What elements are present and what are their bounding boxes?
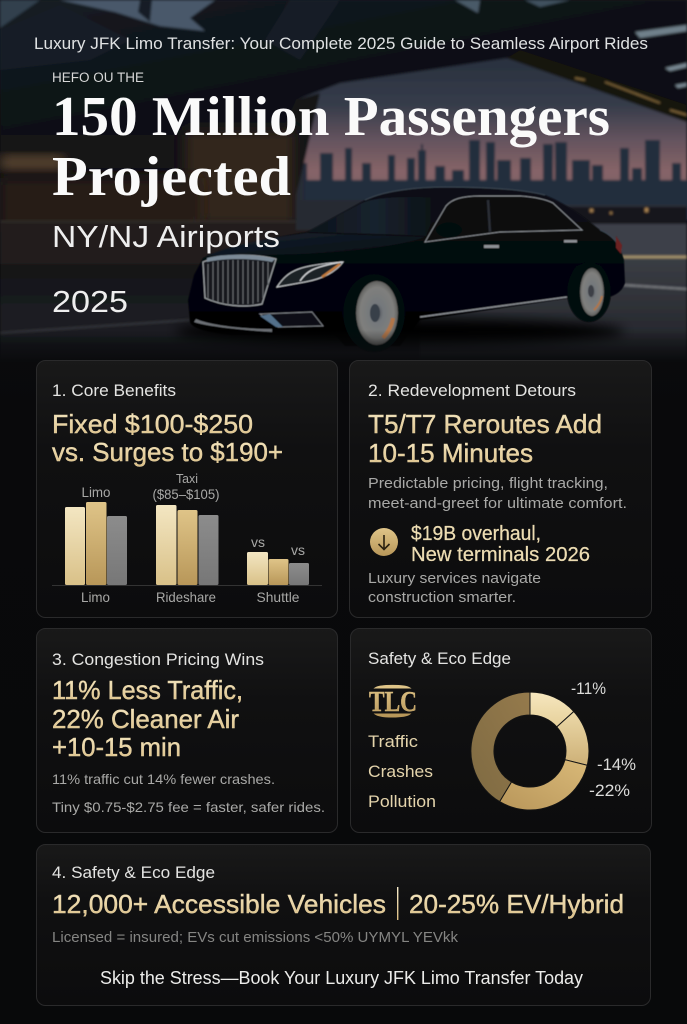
heading: Safety & Eco Edge bbox=[368, 649, 511, 668]
donut chart bbox=[471, 692, 589, 810]
closing note bbox=[368, 570, 541, 606]
side windows bbox=[425, 196, 582, 242]
donut labels: Pollution bbox=[368, 792, 436, 811]
heading: 3. Congestion Pricing Wins bbox=[52, 650, 264, 669]
bar chart: vs bbox=[291, 542, 305, 558]
bar chart: ($85–$105) bbox=[152, 486, 220, 502]
donut values: -22% bbox=[589, 781, 630, 800]
donut labels bbox=[368, 732, 436, 811]
panel: redevelopment detours bbox=[350, 360, 652, 618]
panel: core benefits bbox=[36, 360, 338, 618]
description: 11% traffic cut 14% fewer crashes. bbox=[52, 771, 275, 787]
price headline: Fixed $100-$250 bbox=[52, 409, 253, 439]
car body bbox=[188, 187, 625, 346]
belt and sill chrome bbox=[365, 187, 622, 317]
road left bbox=[0, 264, 420, 360]
panel: congestion pricing bbox=[36, 628, 338, 832]
overhaul callout: $19B overhaul, bbox=[411, 523, 541, 545]
description bbox=[368, 475, 627, 512]
top title: Luxury JFK Limo Transfer: Your Complete 2025 Guide to Seamless Airport Rides bbox=[34, 35, 648, 53]
hero headline: Projected bbox=[52, 146, 291, 208]
panel: safety and eco donut bbox=[350, 628, 652, 832]
window pillar bbox=[488, 200, 490, 232]
front wheel bbox=[343, 274, 405, 352]
donut values bbox=[571, 679, 636, 800]
hero fade into page bbox=[0, 330, 687, 362]
bar chart: Shuttle bbox=[256, 589, 300, 605]
heading: 4. Safety & Eco Edge bbox=[52, 863, 215, 882]
far barrier bbox=[590, 224, 687, 258]
description: Tiny $0.75-$2.75 fee = faster, safer rides. bbox=[52, 799, 325, 815]
closing note: construction smarter. bbox=[368, 589, 516, 606]
heading: 2. Redevelopment Detours bbox=[368, 381, 576, 400]
vehicles headline: 12,000+ Accessible Vehicles bbox=[52, 889, 386, 919]
reroutes headline: 10-15 Minutes bbox=[368, 438, 533, 468]
bar chart: Limo bbox=[81, 589, 110, 605]
roof beam bbox=[507, 50, 687, 122]
overhaul callout: New terminals 2026 bbox=[411, 544, 590, 566]
donut labels: Traffic bbox=[368, 732, 419, 751]
description bbox=[52, 771, 325, 815]
grille bbox=[203, 255, 276, 306]
skyline bbox=[296, 140, 687, 220]
left interior bbox=[0, 135, 296, 265]
description: Predictable pricing, flight tracking, bbox=[368, 475, 608, 492]
hero headline: 150 Million Passengers bbox=[52, 86, 610, 148]
reroutes headline: T5/T7 Reroutes Add bbox=[368, 409, 602, 439]
donut values: -14% bbox=[597, 755, 636, 774]
license note: Licensed = insured; EVs cut emissions <50% UYMYL YEVkk bbox=[52, 929, 458, 946]
icon: TLC badge: TLC bbox=[369, 686, 417, 718]
road right bbox=[420, 258, 687, 360]
traffic headline: 11% Less Traffic, bbox=[52, 675, 243, 705]
eyebrow: HEFO OU THE bbox=[52, 70, 144, 85]
heading: 1. Core Benefits bbox=[52, 381, 176, 400]
description: meet-and-greet for ultimate comfort. bbox=[368, 495, 627, 512]
traffic headline: +10-15 min bbox=[52, 732, 181, 762]
vehicles headline: 20-25% EV/Hybrid bbox=[409, 889, 624, 919]
traffic headline bbox=[52, 675, 243, 762]
bar chart bbox=[52, 471, 322, 605]
hood sheen bbox=[206, 233, 425, 256]
call to action: Skip the Stress—Book Your Luxury JFK Limo Transfer Today bbox=[100, 968, 583, 988]
bar chart: Limo bbox=[82, 484, 111, 500]
lower bumper bbox=[194, 319, 272, 332]
vehicles headline bbox=[52, 887, 624, 920]
closing note: Luxury services navigate bbox=[368, 570, 541, 587]
donut values: -11% bbox=[571, 679, 606, 698]
headlight bbox=[277, 262, 343, 287]
road markings bbox=[0, 320, 190, 333]
skylight panes bbox=[60, 0, 215, 31]
price headline: vs. Surges to $190+ bbox=[52, 437, 283, 467]
car shadow bbox=[175, 318, 625, 346]
hero headline bbox=[52, 86, 610, 208]
ceiling structure bbox=[0, 0, 687, 135]
panel: safety and eco edge bbox=[36, 844, 650, 1006]
bar chart: vs bbox=[251, 534, 265, 550]
reroutes headline bbox=[368, 409, 602, 468]
overhaul callout bbox=[411, 523, 590, 566]
bar chart: Rideshare bbox=[156, 589, 216, 605]
mirror bbox=[436, 222, 462, 238]
limousine bbox=[175, 187, 625, 352]
rear wheel bbox=[567, 262, 611, 322]
donut labels: Crashes bbox=[368, 762, 433, 781]
icon: down arrow bbox=[370, 528, 398, 556]
hero photo background bbox=[0, 0, 687, 360]
windshield bbox=[307, 197, 442, 236]
bar chart: Taxi bbox=[176, 471, 198, 486]
hero year: 2025 bbox=[52, 284, 128, 319]
door handles and tail light bbox=[484, 236, 622, 254]
dusk sky bbox=[290, 58, 687, 215]
hero subline: NY/NJ Airiports bbox=[52, 219, 280, 254]
price headline bbox=[52, 409, 283, 467]
traffic headline: 22% Cleaner Air bbox=[52, 704, 239, 734]
